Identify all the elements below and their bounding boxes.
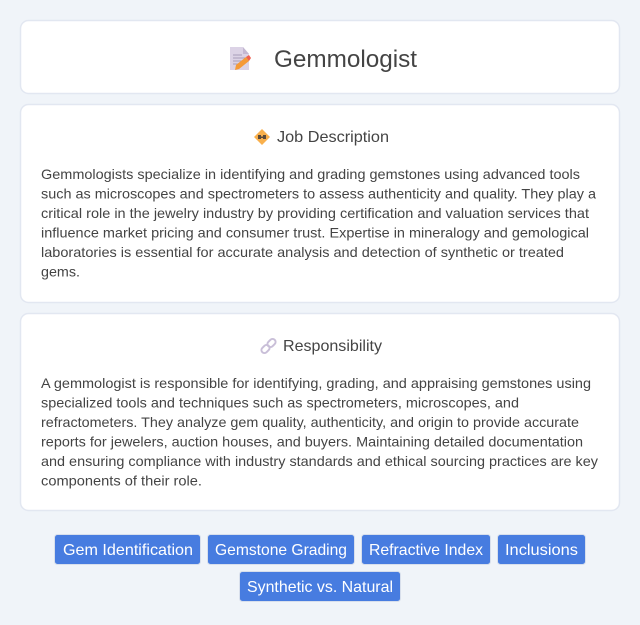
panel: title card (20, 20, 620, 94)
text block: job description: Gemmologists specialize in identifying and grading gemstones using advanced tools (41, 166, 580, 182)
tag: synthetic vs natural (240, 572, 400, 602)
tag: synthetic vs natural: Synthetic vs. Natural (247, 579, 393, 596)
tag: inclusions (498, 534, 586, 564)
text block: responsibility: specialized tools and techniques such as spectrometers, microscopes, and (41, 394, 519, 410)
tag: gemstone grading: Gemstone Grading (215, 542, 347, 559)
text block: responsibility (41, 375, 598, 488)
tag: gemstone grading (208, 534, 354, 564)
panel: job description (20, 104, 620, 302)
text block: job description: influence market pricing and consumer trust. Expertise in mineralogy and gemological (41, 224, 589, 240)
text block: responsibility: A gemmologist is responsible for identifying, grading, and appraising gemstones using (41, 375, 591, 391)
text block: responsibility: refractometers. They analyze gem quality, authenticity, and origin to provide accurate (41, 414, 579, 430)
title: Gemmologist (274, 46, 417, 73)
icon: chain link (260, 338, 277, 354)
tag: inclusions: Inclusions (505, 542, 578, 559)
text block: job description: such as microscopes and spectrometers to assess authenticity and quality. They play a (41, 186, 596, 202)
tag: gem identification (54, 534, 200, 564)
tag: gem identification: Gem Identification (63, 542, 193, 559)
text block: responsibility: and ensuring compliance with industry standards and ethical sourcing practices are key (41, 453, 598, 469)
text block: responsibility: reports for jewelers, auction houses, and buyers. Maintaining detailed documentation (41, 434, 583, 450)
icon: document with pencil (230, 47, 251, 70)
text block: responsibility: components of their role. (41, 472, 202, 488)
text block: job description: critical role in the jewelry industry by providing certification and valuation services that (41, 205, 589, 221)
heading: job description: Job Description (277, 129, 389, 146)
text block: job description (41, 166, 596, 280)
text block: job description: gems. (41, 264, 80, 280)
text block: job description: laboratories is essential for accurate analysis and detection of synthetic or treated (41, 244, 564, 260)
panel: responsibility (20, 314, 620, 510)
tag: refractive index (362, 534, 490, 564)
icon: orange diamond (254, 129, 270, 145)
tag: refractive index: Refractive Index (369, 542, 483, 559)
heading: responsibility: Responsibility (283, 338, 382, 355)
